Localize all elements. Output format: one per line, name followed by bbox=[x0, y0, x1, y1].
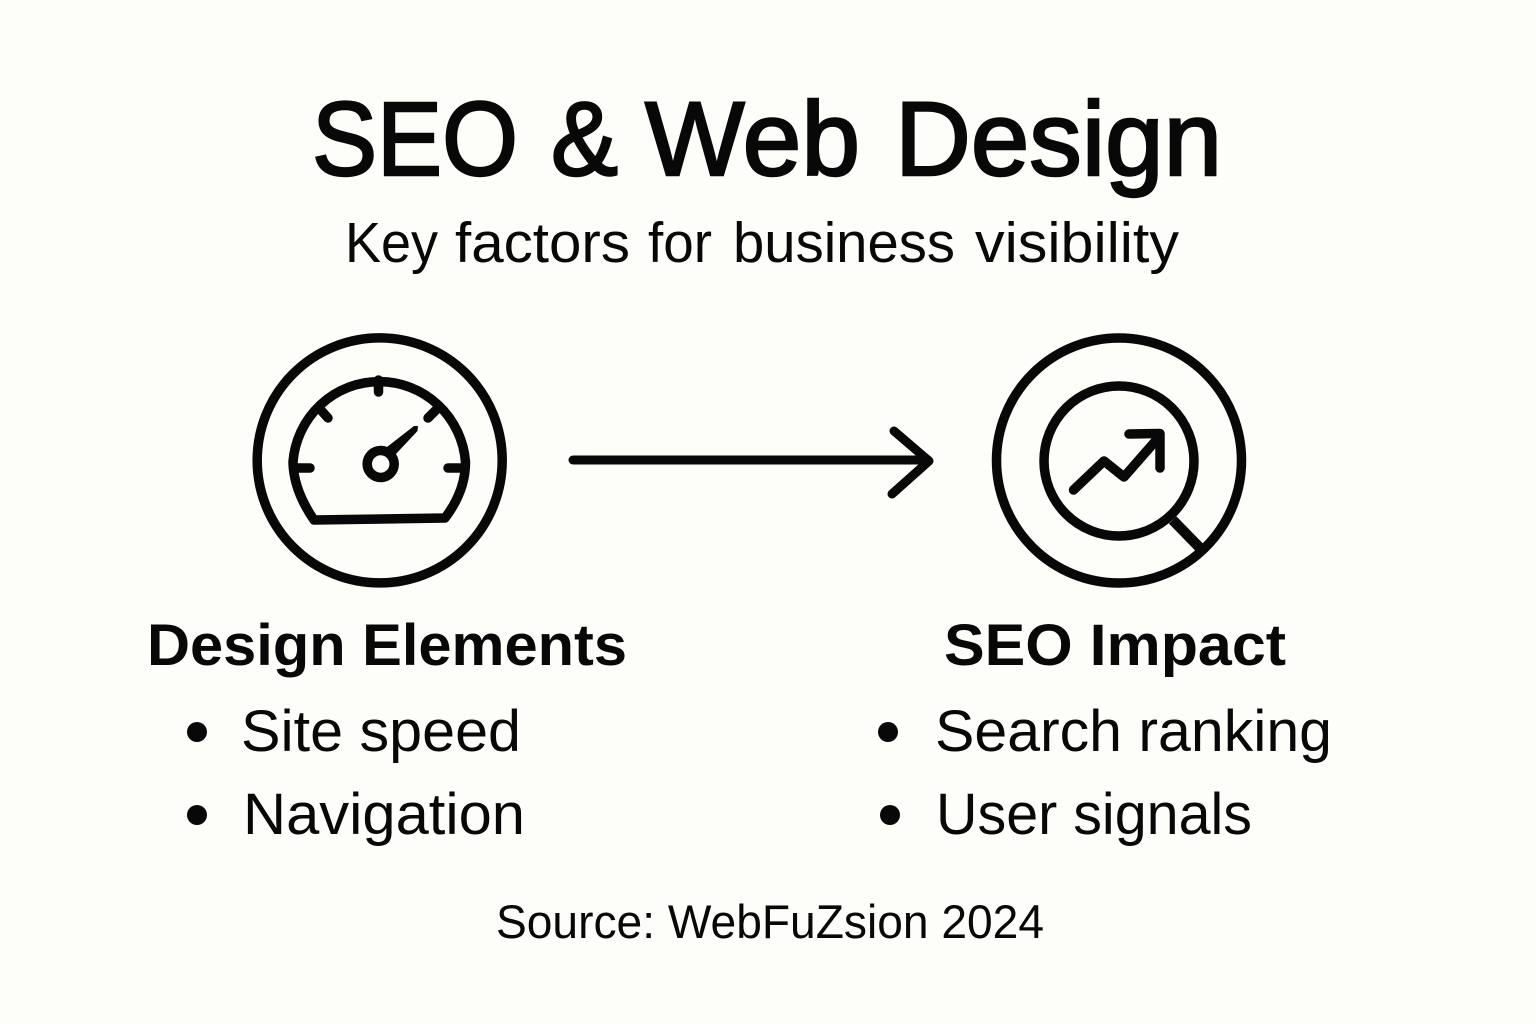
heading: design elements: Design Elements bbox=[147, 613, 627, 678]
title: & bbox=[551, 81, 618, 198]
subtitle: visibility bbox=[975, 211, 1180, 275]
title: Design bbox=[895, 81, 1222, 198]
title: Web bbox=[645, 81, 860, 198]
title: SEO bbox=[312, 81, 518, 198]
heading: SEO impact: SEO Impact bbox=[944, 613, 1286, 678]
list: design elements: Site speed bbox=[241, 699, 521, 764]
subtitle: for bbox=[648, 211, 712, 275]
subtitle: factors bbox=[455, 211, 630, 275]
icon: speedometer bbox=[257, 338, 502, 583]
list: SEO impact: Search ranking bbox=[935, 699, 1332, 764]
subtitle: business bbox=[733, 211, 955, 275]
list: SEO impact: User signals bbox=[936, 782, 1252, 847]
list: design elements: Navigation bbox=[243, 782, 525, 847]
arrow bbox=[573, 431, 929, 494]
icon: magnifier with trend bbox=[996, 338, 1242, 583]
source note: Source: WebFuZsion 2024 bbox=[496, 895, 1044, 948]
list: design elements bbox=[187, 699, 525, 847]
subtitle: Key bbox=[345, 211, 438, 275]
list: SEO impact bbox=[878, 699, 1332, 847]
